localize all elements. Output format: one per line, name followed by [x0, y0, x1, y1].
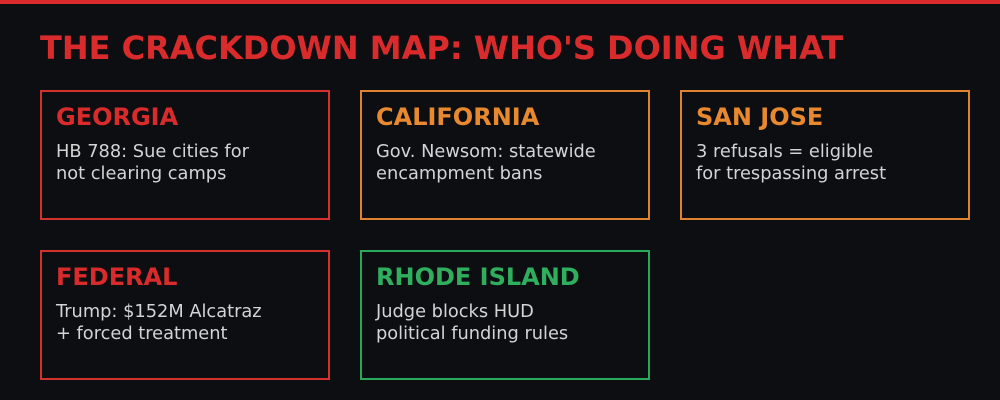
panel: california: encampment bans: [376, 163, 542, 184]
title: THE CRACKDOWN MAP: WHO'S DOING WHAT: [40, 29, 843, 67]
panel: federal: FEDERAL: [56, 263, 177, 291]
panel: san jose: [680, 90, 970, 220]
panel: california: Gov. Newsom: statewide: [376, 141, 596, 162]
panel: georgia: [40, 90, 330, 220]
panel: san jose: for trespassing arrest: [696, 163, 886, 184]
panel: california: CALIFORNIA: [376, 103, 539, 131]
panel: georgia: GEORGIA: [56, 103, 178, 131]
panel: georgia: HB 788: Sue cities for: [56, 141, 249, 162]
panel: rhode island: political funding rules: [376, 323, 568, 344]
panel: rhode island: [360, 250, 650, 380]
panel: rhode island: RHODE ISLAND: [376, 263, 580, 291]
panel: federal: Trump: $152M Alcatraz: [56, 301, 262, 322]
panel: california: [360, 90, 650, 220]
panel: federal: + forced treatment: [56, 323, 227, 344]
panel: san jose: 3 refusals = eligible: [696, 141, 873, 162]
panel: georgia: not clearing camps: [56, 163, 226, 184]
panel: rhode island: Judge blocks HUD: [376, 301, 534, 322]
panel: san jose: SAN JOSE: [696, 103, 823, 131]
panel: federal: [40, 250, 330, 380]
